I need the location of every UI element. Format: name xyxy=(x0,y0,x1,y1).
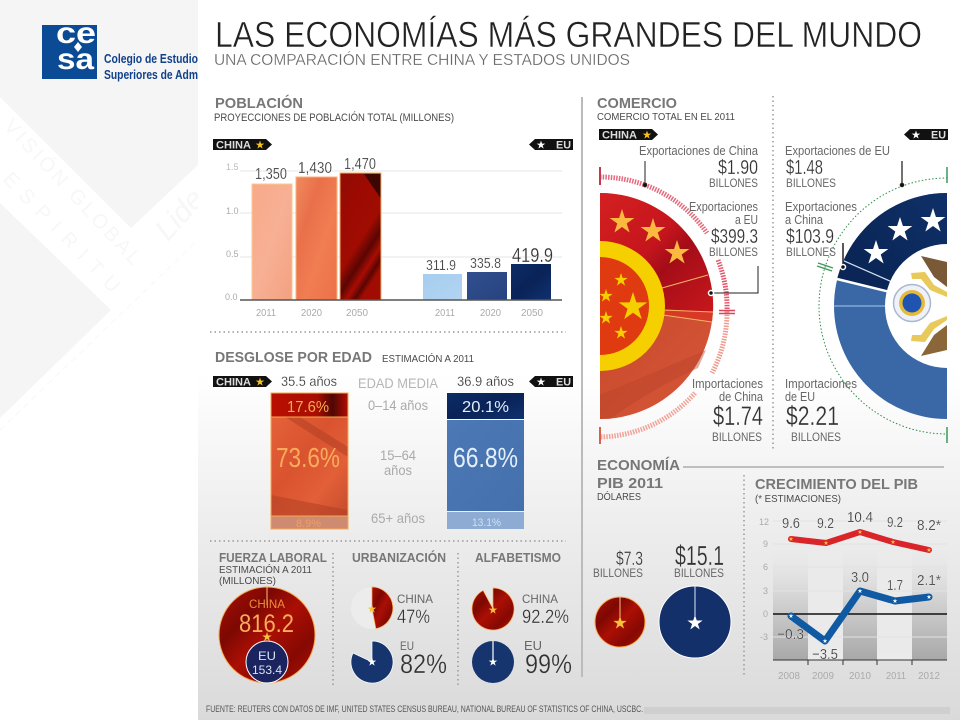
callout lines xyxy=(643,161,904,296)
subheading: estimación a 2011: ESTIMACIÓN A 2011 xyxy=(382,352,474,365)
subtitle: UNA COMPARACIÓN ENTRE CHINA Y ESTADOS UNIDOS xyxy=(214,50,630,69)
median age labels: EDAD MEDIA xyxy=(358,375,439,391)
heading: fuerza laboral: FUERZA LABORAL xyxy=(219,550,327,565)
panel: desglose por edad xyxy=(213,349,573,530)
China imports text: BILLONES xyxy=(712,430,762,444)
GDP EU xyxy=(659,540,731,658)
China imports text: $1.74 xyxy=(713,401,763,431)
tag: EU: EU xyxy=(556,376,571,388)
GDP China xyxy=(593,549,645,647)
circle: labor force xyxy=(219,587,315,683)
population bar chart: 1,350 xyxy=(255,166,287,183)
line chart: −0.3 xyxy=(777,626,804,643)
EU exports to China text: a China xyxy=(785,212,824,227)
China exports to EU text: Exportaciones xyxy=(689,199,758,214)
subheading: proyecciones: PROYECCIONES DE POBLACIÓN TOTAL (MILLONES) xyxy=(214,111,454,124)
heading: población: POBLACIÓN xyxy=(215,94,303,112)
line chart: 9 xyxy=(763,539,768,549)
EU imports text: de EU xyxy=(785,389,815,404)
pie: EU 82%: 82% xyxy=(400,649,447,679)
GDP China: BILLONES xyxy=(593,566,643,580)
left strip background with watermark: ESPIRITU xyxy=(0,168,124,297)
line chart: 2012 xyxy=(918,671,940,682)
pie: EU 99%: 99% xyxy=(525,649,572,679)
China export text: BILLONES xyxy=(709,176,758,190)
tag: China xyxy=(599,129,658,142)
age bar: EU xyxy=(447,393,524,529)
population bar chart: 335.8 xyxy=(470,255,501,272)
subheading: comercio total: COMERCIO TOTAL EN EL 2011 xyxy=(597,111,735,123)
subheading: PIB 2011 xyxy=(597,475,663,503)
logo: CESA: ce xyxy=(56,17,96,50)
line chart: 1.7 xyxy=(887,577,903,594)
logo: CESA: Colegio de Estudio xyxy=(104,51,198,66)
heading: urbanización: URBANIZACIÓN xyxy=(352,550,446,565)
China exports to EU text: $399.3 xyxy=(711,226,758,248)
pie: EU 99% xyxy=(472,638,572,683)
panel: economía PIB 2011 xyxy=(593,457,944,658)
panel: población xyxy=(213,94,573,319)
tag: EU: EU xyxy=(931,130,946,142)
China imports text xyxy=(692,376,764,444)
heading: alfabetismo: ALFABETISMO xyxy=(475,550,561,565)
logo: CESA: sa xyxy=(57,43,94,76)
line chart: -3 xyxy=(760,632,768,642)
EU exports to China text: $103.9 xyxy=(786,226,834,248)
tag: China: CHINA xyxy=(216,140,251,152)
EU export text: $1.48 xyxy=(786,157,823,179)
line chart: 8.2* xyxy=(917,517,941,534)
population bar chart: 1.5 xyxy=(226,162,239,172)
pie: China 92.2%: CHINA xyxy=(522,592,558,606)
China imports text: de China xyxy=(719,389,764,404)
left strip background with watermark: VISIÓN GLOBAL xyxy=(0,115,146,269)
line chart: 9.2 xyxy=(817,515,834,532)
China exports to EU text xyxy=(689,199,758,259)
panel: comercio xyxy=(598,98,948,444)
panel: crecimiento del PIB xyxy=(755,476,947,682)
line chart xyxy=(759,509,947,682)
China dashed trade arcs xyxy=(600,167,735,444)
left strip background with watermark xyxy=(0,0,198,418)
population bar chart: 0.5 xyxy=(226,249,239,259)
line chart: 2008 xyxy=(778,671,800,682)
population bar chart: 1,430 xyxy=(298,160,332,177)
GDP EU: $15.1 xyxy=(675,540,724,571)
population bar chart: 311.9 xyxy=(426,257,456,274)
pie: EU 99%: EU xyxy=(524,638,542,653)
population bar chart: 1.0 xyxy=(226,206,239,216)
line chart: 12 xyxy=(759,517,769,527)
subheading: PIB 2011: DÓLARES xyxy=(597,490,641,503)
EU trade half disc xyxy=(834,193,947,419)
China exports to EU text: a EU xyxy=(735,212,758,227)
circle: labor force: CHINA xyxy=(249,597,285,611)
tag: EU: EU xyxy=(556,140,571,152)
line chart: 9.2 xyxy=(887,514,903,531)
line chart: 2010 xyxy=(849,671,871,682)
age group labels: 65+ años xyxy=(371,510,425,526)
age bar: China xyxy=(271,393,348,530)
tag: EU xyxy=(529,139,573,152)
circle: labor force: 153.4 xyxy=(252,663,282,677)
line chart: 6 xyxy=(763,562,768,572)
population bar chart: 2011 xyxy=(256,308,276,319)
circle: labor force: 816.2 xyxy=(239,610,294,638)
EU imports text xyxy=(785,376,857,444)
pie: China 92.2% xyxy=(472,588,569,630)
China trade half disc xyxy=(600,193,714,419)
logo: CESA: Superiores de Adm xyxy=(104,67,198,82)
pie: China 92.2%: 92.2% xyxy=(522,607,569,628)
EU export text xyxy=(785,143,890,190)
median age labels: 36.9 años xyxy=(457,373,514,389)
population bar chart: 2020 xyxy=(480,308,501,319)
age bar: EU: 66.8% xyxy=(453,442,518,473)
panel: alfabetismo xyxy=(472,550,572,683)
tag: China xyxy=(213,376,272,388)
median age labels xyxy=(281,373,514,391)
EU imports text: Importaciones xyxy=(785,376,857,391)
China export text: $1.90 xyxy=(718,157,758,179)
EU exports to China text xyxy=(785,199,857,259)
population bar chart: 2011 xyxy=(435,308,455,319)
GDP China: $7.3 xyxy=(616,549,643,570)
population bar chart xyxy=(225,156,562,319)
subheading: estimación: (MILLONES) xyxy=(219,575,276,587)
EU export text: BILLONES xyxy=(786,176,836,190)
line chart: 10.4 xyxy=(847,509,873,526)
subheading: estimación: ESTIMACIÓN A 2011 xyxy=(219,563,312,576)
age group labels xyxy=(368,397,428,526)
tag: China: CHINA xyxy=(602,130,637,142)
population bar chart: 0.0 xyxy=(225,292,238,302)
line chart: 3 xyxy=(763,586,768,596)
heading: desglose por edad: DESGLOSE POR EDAD xyxy=(215,349,372,366)
age bar: EU: 20.1% xyxy=(462,399,509,416)
median age labels: 35.5 años xyxy=(281,373,337,389)
main panel background xyxy=(198,0,960,720)
China export text xyxy=(639,143,759,190)
line chart: 2.1* xyxy=(917,572,941,589)
line chart: 9.6 xyxy=(782,515,800,532)
age bar: China: 17.6% xyxy=(287,399,329,416)
tag: EU xyxy=(529,376,573,388)
pie: China 47%: CHINA xyxy=(397,592,433,606)
tag: China xyxy=(213,139,272,152)
pie: China 47% xyxy=(351,587,433,629)
population bar chart: 1,470 xyxy=(344,156,376,173)
EU imports text: $2.21 xyxy=(786,401,839,431)
line chart: 2011 xyxy=(886,671,906,682)
subheading: estimaciones: (* ESTIMACIONES) xyxy=(755,493,841,505)
heading: crecimiento del PIB: CRECIMIENTO DEL PIB xyxy=(755,476,918,493)
China export text: Exportaciones de China xyxy=(639,143,759,158)
heading: economía: ECONOMÍA xyxy=(597,457,680,474)
age group labels: años xyxy=(384,462,412,478)
population bar chart: 2020 xyxy=(301,308,322,319)
circle: labor force: EU xyxy=(258,649,276,663)
EU imports text: BILLONES xyxy=(791,430,841,444)
population bar chart: 419.9 xyxy=(512,245,553,267)
tag: EU xyxy=(904,129,948,142)
subheading: PIB 2011: PIB 2011 xyxy=(597,475,663,492)
pie: China 47%: 47% xyxy=(397,607,430,628)
population bar chart: 2050 xyxy=(521,308,543,319)
China exports to EU text: BILLONES xyxy=(709,245,758,259)
pie: EU 82% xyxy=(351,639,447,683)
age bar: China: 73.6% xyxy=(276,442,340,473)
subheading: estimación xyxy=(219,563,312,587)
age bar: China: 8.9% xyxy=(296,518,321,530)
line chart: 2009 xyxy=(812,671,834,682)
GDP EU: BILLONES xyxy=(674,566,724,580)
age group labels: 0–14 años xyxy=(368,397,428,413)
source line: FUENTE: REUTERS CON DATOS DE IMF, UNITED STATES CENSUS BUREAU, NATIONAL BUREAU OF STATISTICS OF CHINA, USCBC. xyxy=(206,704,643,714)
pie: EU 82%: EU xyxy=(400,639,414,653)
EU dotted trade arcs xyxy=(817,167,960,443)
logo: CESA xyxy=(42,17,198,82)
panel: urbanización xyxy=(351,550,447,683)
population bar chart: 2050 xyxy=(346,308,368,319)
EU exports to China text: Exportaciones xyxy=(785,199,857,214)
tag: China: CHINA xyxy=(216,376,251,388)
EU exports to China text: BILLONES xyxy=(786,245,836,259)
line chart: −3.5 xyxy=(812,646,838,663)
left strip background with watermark: Lide xyxy=(149,182,211,247)
line chart: 3.0 xyxy=(851,569,869,586)
China imports text: Importaciones xyxy=(692,376,763,391)
panel: fuerza laboral xyxy=(219,550,327,683)
line chart: 0 xyxy=(763,609,768,619)
age bar: EU: 13.1% xyxy=(472,517,501,529)
EU export text: Exportaciones de EU xyxy=(785,143,890,158)
age group labels: 15–64 xyxy=(380,447,416,463)
heading: comercio: COMERCIO xyxy=(597,95,677,112)
